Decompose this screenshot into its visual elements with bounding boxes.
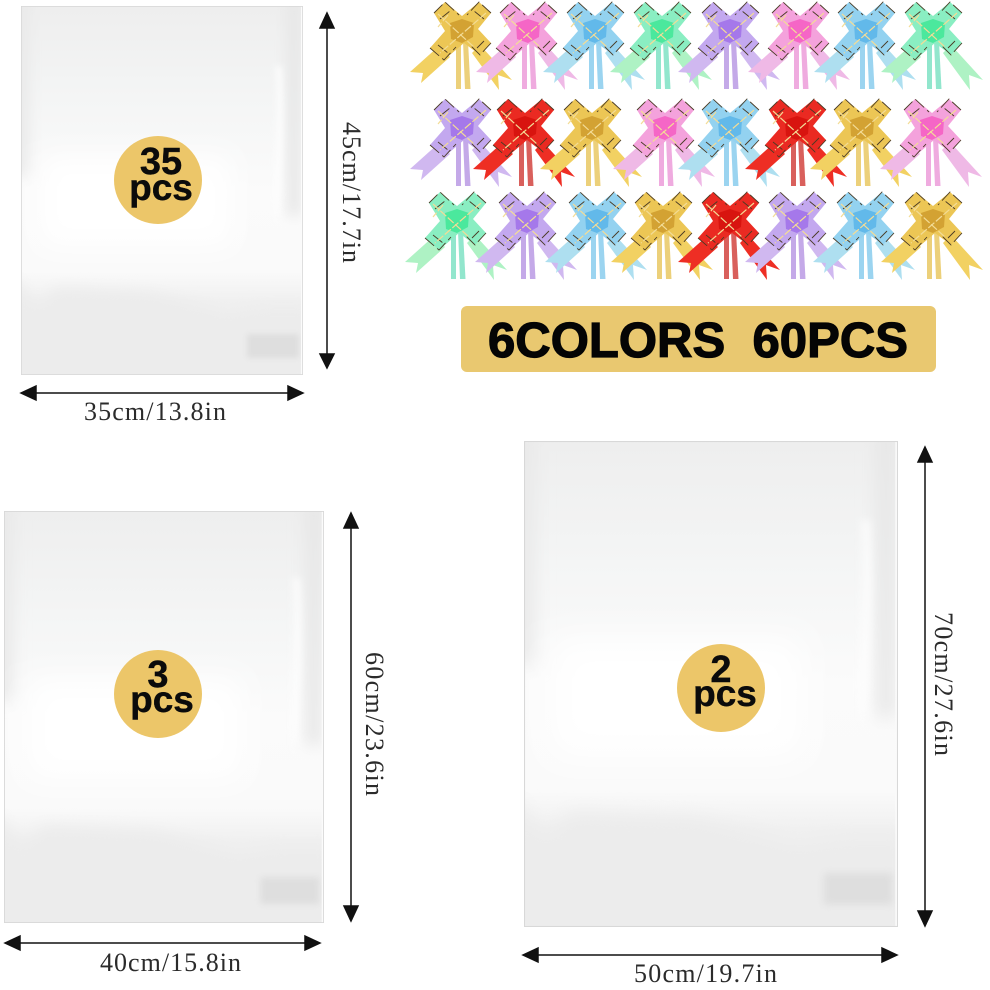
arrow: height — [918, 447, 932, 926]
badge: 3 pcs: 3 — [147, 654, 169, 696]
badge: 3 pcs — [114, 650, 202, 738]
label: height: 70cm/27.6in — [929, 612, 958, 756]
arrow: height — [344, 513, 358, 921]
label: height: 45cm/17.7in — [337, 122, 366, 263]
panel: 35 pcs bag — [11, 0, 366, 426]
clear bag 40x60cm — [0, 500, 333, 935]
badge: 2 pcs: 2 — [710, 649, 732, 691]
clear bag 35x45cm — [11, 0, 311, 386]
clear bag 50x70cm — [511, 428, 909, 941]
badge: 2 pcs: pcs — [693, 673, 757, 714]
badge: 35 pcs: 35 — [140, 141, 182, 183]
bows row 2 — [410, 99, 982, 187]
arrow: width — [523, 948, 897, 962]
panel: pull bows — [405, 2, 983, 372]
bows row 1 — [410, 2, 983, 90]
badge: 35 pcs — [114, 136, 202, 224]
badge: 35 pcs: pcs — [129, 167, 193, 208]
arrow: height — [320, 13, 334, 368]
label: width: 40cm/15.8in — [100, 948, 241, 977]
badge: 2 pcs — [677, 644, 765, 732]
bows row 3 — [405, 192, 983, 280]
banner: 6 colors 60 pcs: 6COLORS 60PCS — [488, 314, 908, 368]
arrow: width — [21, 386, 303, 400]
panel: 2 pcs bag — [511, 428, 958, 988]
label: width: 35cm/13.8in — [84, 397, 226, 426]
panel: 3 pcs bag — [0, 500, 389, 977]
label: width: 50cm/19.7in — [634, 959, 777, 988]
arrow: width — [5, 936, 320, 950]
badge: 3 pcs: pcs — [130, 679, 194, 720]
label: height: 60cm/23.6in — [360, 652, 389, 796]
